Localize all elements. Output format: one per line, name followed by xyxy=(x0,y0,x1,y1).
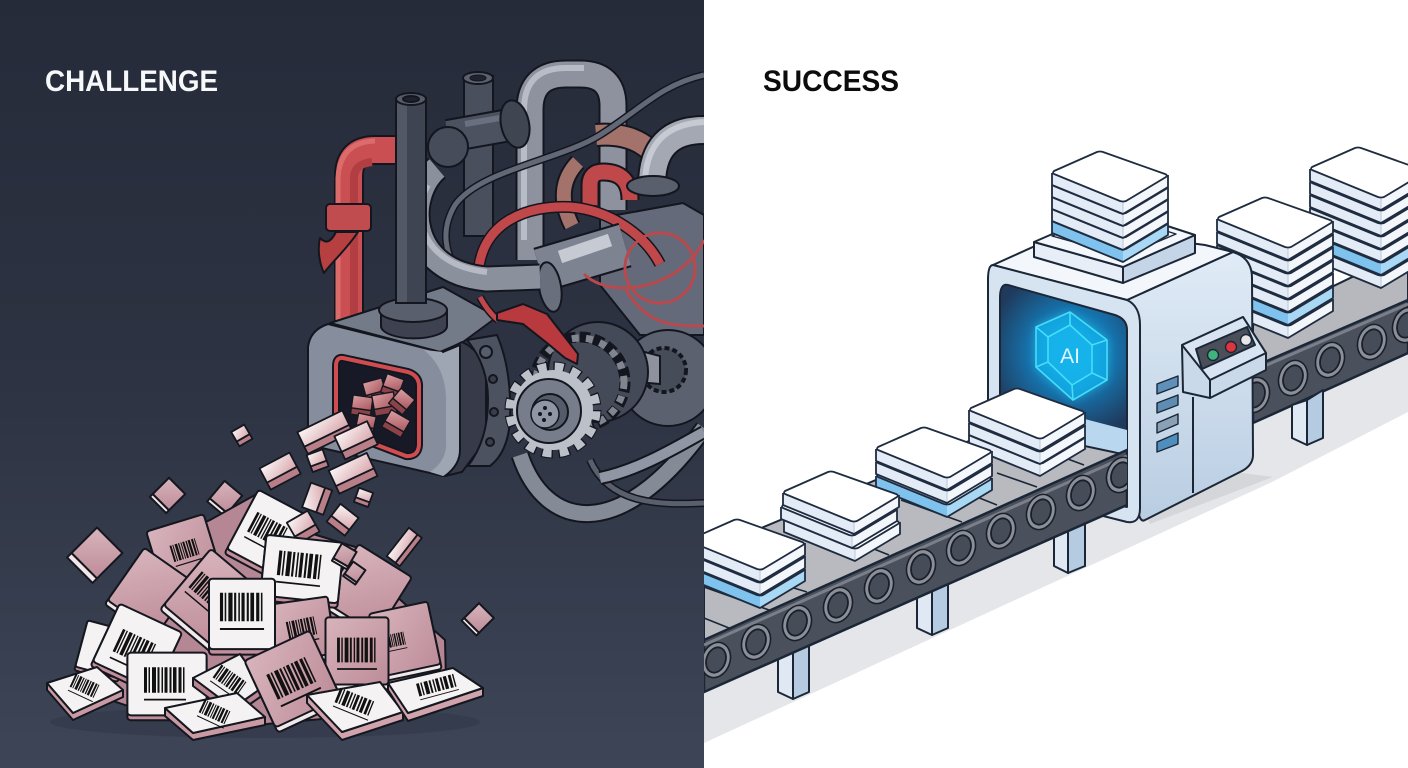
machine shadow xyxy=(1148,473,1272,524)
bricks inside chute xyxy=(350,374,415,438)
central dark pipe xyxy=(379,93,447,338)
control panel xyxy=(1182,317,1266,398)
illustration: AI conveyor line xyxy=(689,148,1408,743)
stack entering machine xyxy=(969,388,1085,476)
red clamp and hook xyxy=(319,204,371,273)
thin cable xyxy=(446,75,704,275)
glowing opening xyxy=(1000,285,1127,507)
machine block xyxy=(308,287,497,476)
opening floor xyxy=(1085,419,1127,452)
front conveyor band xyxy=(697,450,1140,692)
big gear xyxy=(511,368,595,452)
vents xyxy=(1157,376,1178,452)
stack on belt 1 xyxy=(689,520,805,608)
stack on belt 3 xyxy=(876,428,992,517)
thin red loops xyxy=(584,233,704,326)
heading: success: SUCCESS xyxy=(763,65,899,98)
AI machine xyxy=(988,228,1266,522)
machine front frame xyxy=(988,265,1140,522)
machine top xyxy=(992,242,1233,300)
front belt xyxy=(704,428,1127,642)
rear conveyor band xyxy=(1236,300,1408,423)
pink rear label xyxy=(268,596,336,666)
side seam xyxy=(1192,397,1194,493)
red curved cable xyxy=(478,207,660,280)
machine body side xyxy=(1127,252,1253,521)
left white label xyxy=(91,604,182,695)
pile silhouette xyxy=(105,495,446,730)
fragment bricks xyxy=(231,410,422,566)
barrel xyxy=(535,240,625,314)
panel: challenge background xyxy=(0,0,704,768)
pink torn label xyxy=(326,617,388,690)
flat front labels xyxy=(165,668,483,740)
top plate xyxy=(1034,208,1195,283)
red wedge xyxy=(480,297,578,364)
top torn label xyxy=(224,490,320,583)
chute opening xyxy=(336,358,419,456)
fragment diamonds xyxy=(67,478,494,635)
pink diagonal label xyxy=(160,549,264,654)
brown pipes xyxy=(564,135,650,226)
panel: success background xyxy=(704,0,1408,768)
lower tubes xyxy=(520,428,704,514)
right arch pipe xyxy=(627,122,704,196)
central white label xyxy=(209,579,275,655)
rear belt xyxy=(1253,272,1408,360)
AI hexagon icon: AI xyxy=(1060,345,1080,368)
horizontal dark pipe xyxy=(428,98,534,167)
heading: challenge: CHALLENGE xyxy=(45,65,218,98)
S pipe xyxy=(417,168,540,279)
back pink labels xyxy=(74,514,442,682)
rear vertical pipe xyxy=(463,72,493,236)
third wheel xyxy=(632,329,704,427)
stack on belt 2 xyxy=(781,472,900,561)
flat left label xyxy=(47,667,123,720)
red elbow pipe xyxy=(338,141,395,325)
rear stack B xyxy=(1310,148,1408,288)
rear stack A xyxy=(1217,198,1333,338)
barcode label pile xyxy=(47,490,483,740)
flange with bolts xyxy=(467,335,510,466)
legs xyxy=(778,390,1323,699)
pink front label xyxy=(244,630,343,733)
drum and shaft xyxy=(535,322,660,427)
shadow under pile xyxy=(50,706,480,738)
AI hexagon icon xyxy=(1036,312,1107,400)
mid flat label xyxy=(193,654,263,716)
white tilted label xyxy=(260,535,365,608)
red U pipe xyxy=(590,172,630,205)
illustration: tangled machine xyxy=(308,68,716,514)
front white label xyxy=(127,653,207,720)
illustration: falling fragments xyxy=(47,410,494,740)
top stack xyxy=(1052,152,1168,262)
right block xyxy=(600,203,704,335)
arch pipe xyxy=(524,68,613,260)
floor shadow xyxy=(704,330,1408,743)
